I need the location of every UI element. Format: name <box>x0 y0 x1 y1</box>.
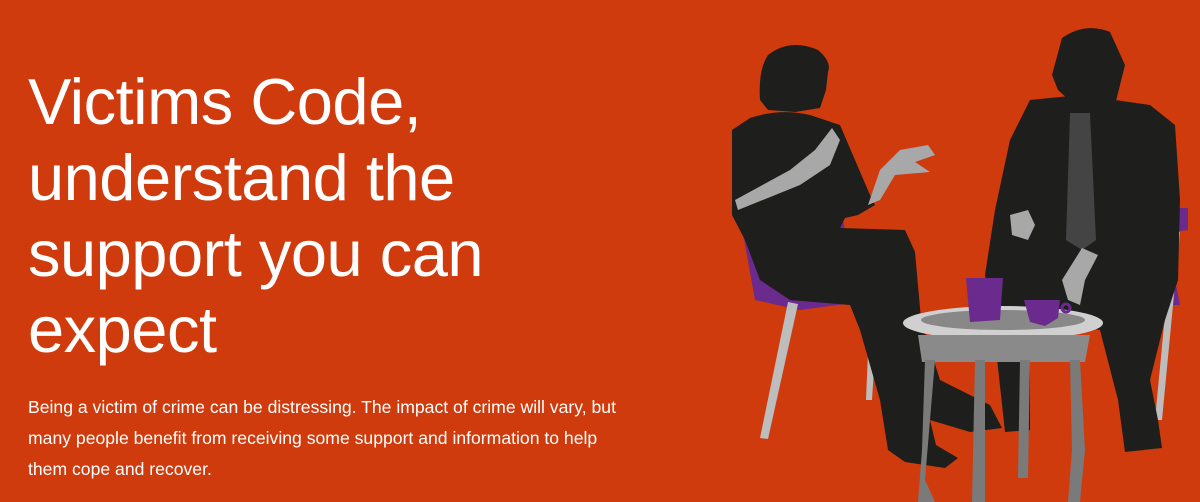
title: expect <box>28 293 217 366</box>
title <box>28 65 483 366</box>
intro paragraph: them cope and recover. <box>28 459 212 479</box>
intro paragraph: Being a victim of crime can be distressing. The impact of crime will vary, but <box>28 397 616 417</box>
illustration: two people talking at a table <box>732 28 1188 502</box>
title: support you can <box>28 217 483 290</box>
intro paragraph: many people benefit from receiving some support and information to help <box>28 428 597 448</box>
title: Victims Code, <box>28 65 421 138</box>
woman chair <box>742 190 878 439</box>
man figure <box>985 28 1180 452</box>
table <box>903 306 1103 502</box>
title: understand the <box>28 141 455 214</box>
intro paragraph <box>28 397 616 479</box>
woman figure <box>732 45 1002 468</box>
cups <box>966 278 1070 326</box>
man chair <box>1100 208 1188 420</box>
